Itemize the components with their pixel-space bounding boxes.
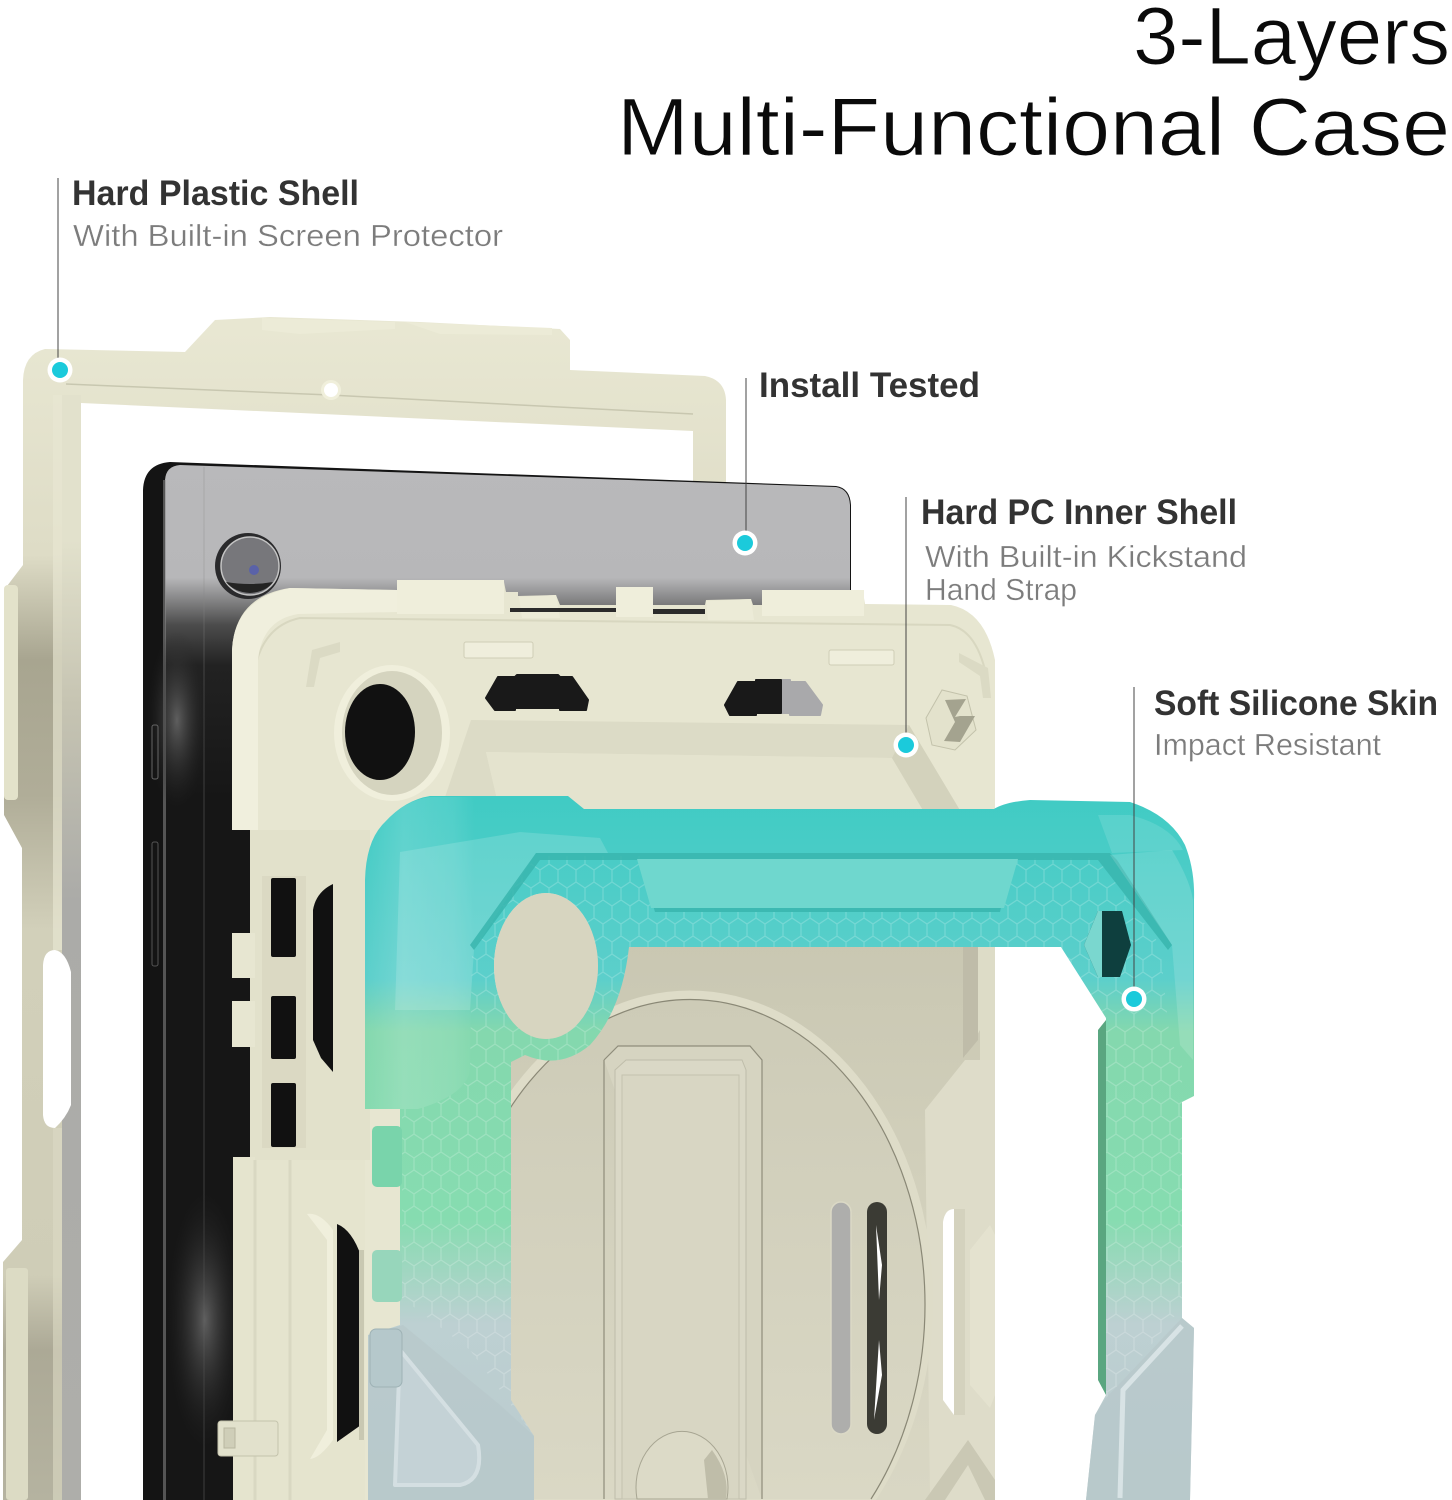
camera cutout xyxy=(334,665,450,801)
tablet camera lens xyxy=(215,533,281,599)
hex kickstand knob xyxy=(926,690,976,750)
title: Multi-Functional Case xyxy=(617,82,1450,173)
callout: install tested xyxy=(732,366,980,556)
side buttons xyxy=(370,1126,402,1387)
callout: soft silicone skin xyxy=(1122,684,1438,1012)
layer 3: soft silicone skin xyxy=(365,796,1194,1500)
shell side cutouts and bracket xyxy=(218,830,370,1459)
callout: hard plastic shell: Hard Plastic Shell xyxy=(72,174,359,213)
title xyxy=(617,0,1450,173)
callout: soft silicone skin: Soft Silicone Skin xyxy=(1154,684,1438,723)
callout: install tested: Install Tested xyxy=(759,366,980,405)
callout: hard plastic shell xyxy=(48,174,503,382)
callout: hard PC inner shell xyxy=(894,493,1247,758)
shell back panel with rotating disc and hand strap xyxy=(447,930,995,1500)
callout: soft silicone skin: Impact Resistant xyxy=(1154,727,1381,762)
layer 1: hard plastic shell frame xyxy=(3,317,726,1500)
callout: hard PC inner shell: Hand Strap xyxy=(925,572,1077,607)
callout: hard PC inner shell: With Built-in Kickstand xyxy=(925,539,1247,574)
callout: hard PC inner shell: Hard PC Inner Shell xyxy=(921,493,1237,532)
tablet device xyxy=(143,462,851,1500)
layer 2: hard PC inner shell xyxy=(232,580,995,1500)
callout: hard plastic shell: With Built-in Screen Protector xyxy=(73,218,503,253)
